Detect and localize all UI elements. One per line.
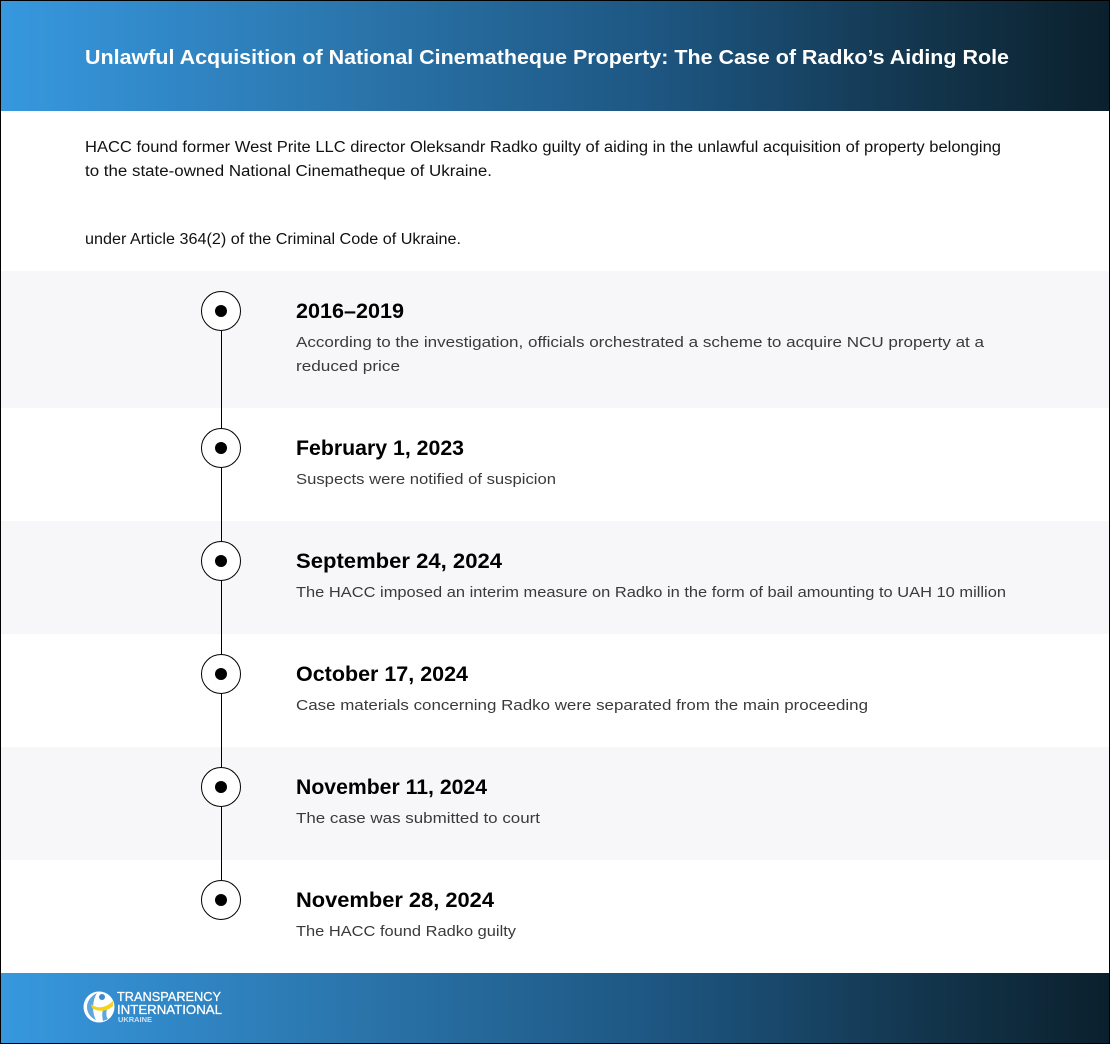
event: 2016–2019: 2016–2019: [296, 300, 404, 323]
event: November 28, 2024: [296, 889, 517, 940]
event: February 1, 2023: [296, 437, 556, 488]
intro text: [85, 139, 1001, 248]
event: October 17, 2024: Case materials concerning Radko were separated from the main proceeding: [296, 697, 868, 714]
footer banner: [0, 973, 1110, 1044]
timeline row backgrounds: [0, 271, 1110, 860]
event: 2016–2019: reduced price: [296, 358, 400, 375]
logo wordmark: INTERNATIONAL: [117, 1002, 222, 1017]
event: November 28, 2024: The HACC found Radko guilty: [296, 923, 517, 940]
event: October 17, 2024: October 17, 2024: [296, 663, 468, 686]
logo wordmark: TRANSPARENCY: [117, 989, 221, 1004]
title: Unlawful Acquisition of National Cinematheque Property: The Case of Radko’s Aiding Role: [85, 47, 1009, 69]
event: February 1, 2023: Suspects were notified of suspicion: [296, 471, 556, 488]
header banner: [0, 0, 1110, 111]
event: September 24, 2024: September 24, 2024: [296, 550, 502, 573]
event: 2016–2019: According to the investigation, officials orchestrated a scheme to acquire NCU property at a: [296, 334, 985, 351]
logo wordmark: [117, 989, 222, 1024]
logo wordmark: UKRAINE: [118, 1017, 152, 1024]
icon: Transparency International logo: [84, 992, 114, 1022]
event: November 28, 2024: November 28, 2024: [296, 889, 494, 912]
event: November 11, 2024: November 11, 2024: [296, 776, 487, 799]
timeline markers: [202, 292, 240, 920]
event: October 17, 2024: [296, 663, 868, 714]
event: November 11, 2024: The case was submitted to court: [296, 810, 541, 827]
event: February 1, 2023: February 1, 2023: [296, 437, 464, 460]
event: September 24, 2024: [296, 550, 1006, 601]
event: November 11, 2024: [296, 776, 541, 827]
timeline line: [220, 331, 222, 880]
event: September 24, 2024: The HACC imposed an interim measure on Radko in the form of bail amounting to UAH 10 million: [296, 584, 1006, 601]
intro text: under Article 364(2) of the Criminal Code of Ukraine.: [85, 231, 461, 248]
event: 2016–2019: [296, 300, 985, 375]
intro text: HACC found former West Prite LLC director Oleksandr Radko guilty of aiding in the unlawful acquisition of property belonging: [85, 139, 1001, 156]
intro text: to the state-owned National Cinematheque of Ukraine.: [85, 163, 492, 180]
